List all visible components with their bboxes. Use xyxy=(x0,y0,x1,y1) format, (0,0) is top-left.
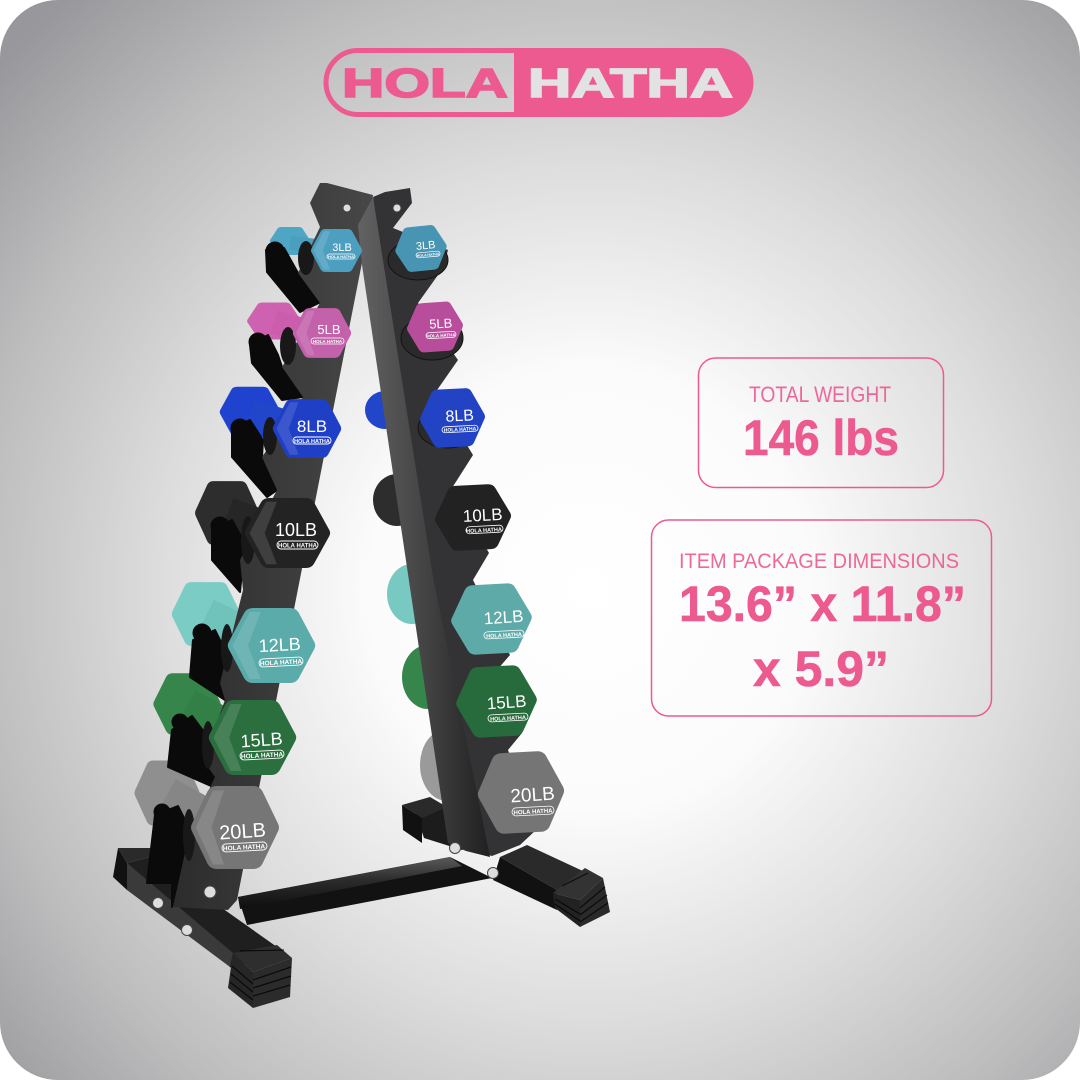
dumbbell 5LB right: 5LB xyxy=(429,315,453,332)
dumbbell 15LB right: 15LB xyxy=(486,692,527,713)
dumbbell 8LB right: HOLA HATHA xyxy=(444,426,477,434)
dumbbell 8LB left xyxy=(276,402,334,455)
dumbbell 5LB left: HOLA HATHA xyxy=(313,339,343,344)
dumbbell 10LB left xyxy=(250,502,321,564)
dumbbell 12LB right: HOLA HATHA xyxy=(486,632,522,640)
dumbbell 15LB left: HOLA HATHA xyxy=(241,751,284,761)
dumbbell 20LB left: 20LB xyxy=(219,819,267,845)
dumbbell 3LB left: 3LB xyxy=(332,242,352,254)
dumbbell 5LB right xyxy=(412,306,458,348)
dumbbell 5LB left xyxy=(296,311,345,355)
logo: HolaHatha xyxy=(326,48,754,117)
dumbbell 10LB left: HOLA HATHA xyxy=(278,544,318,550)
dumbbell 20LB right: HOLA HATHA xyxy=(513,808,553,817)
rack: right sawtooth plate xyxy=(373,188,536,856)
dumbbell 12LB right: 12LB xyxy=(483,607,524,628)
dumbbell 12LB right xyxy=(458,590,525,648)
dumbbell 3LB left: HOLA HATHA xyxy=(328,254,354,259)
dimensions label: ITEM PACKAGE DIMENSIONS xyxy=(679,550,959,573)
dimensions value line 1: 13.6” x 11.8” xyxy=(679,576,966,632)
base: cross bar xyxy=(238,857,492,925)
dumbbell 10LB right: 10LB xyxy=(462,505,503,526)
rack: bolts xyxy=(152,204,498,936)
dumbbell 15LB right xyxy=(463,672,530,731)
dumbbell 8LB right xyxy=(426,394,479,442)
base: left foot xyxy=(113,848,292,1008)
rack: left front plate xyxy=(173,183,373,910)
dumbbell 15LB left xyxy=(214,704,287,771)
total weight value: 146 lbs xyxy=(743,410,899,466)
dumbbell 3LB right: 3LB xyxy=(415,239,436,253)
dumbbell 10LB right: HOLA HATHA xyxy=(466,527,502,535)
dumbbell 15LB left: 15LB xyxy=(240,729,283,751)
dumbbell 8LB left: HOLA HATHA xyxy=(294,439,330,445)
dumbbell 3LB right xyxy=(399,229,443,268)
dimensions value line 2: x 5.9” xyxy=(753,641,889,697)
dumbbell 20LB right xyxy=(486,759,556,826)
dumbbell 20LB left xyxy=(196,790,270,864)
rack: central upright strip xyxy=(358,197,490,857)
dumbbell 12LB left: HOLA HATHA xyxy=(260,658,303,668)
dumbbell 5LB left: 5LB xyxy=(317,322,341,337)
dumbbell 10LB left: 10LB xyxy=(275,520,317,540)
rack: left black rear plate and hooks xyxy=(147,242,325,907)
logo: HolaHatha: HOLA xyxy=(342,60,508,106)
callout: item package dimensions xyxy=(652,520,992,716)
logo: HolaHatha: HATHA xyxy=(528,60,733,106)
dumbbell 10LB right xyxy=(442,490,504,545)
dumbbell 8LB left: 8LB xyxy=(297,417,327,436)
dumbbell 20LB left: HOLA HATHA xyxy=(223,843,266,853)
total weight label: TOTAL WEIGHT xyxy=(749,382,891,407)
dumbbell 12LB left: 12LB xyxy=(258,634,301,656)
dumbbell 20LB right: 20LB xyxy=(510,783,555,808)
dumbbell 8LB right: 8LB xyxy=(445,407,474,426)
base: right foot xyxy=(493,845,610,927)
rear dumbbell heads and handles, left column xyxy=(141,230,325,824)
rear dumbbell heads, right column xyxy=(365,391,474,801)
dumbbell 12LB left xyxy=(232,612,306,679)
callout: total weight xyxy=(698,358,944,488)
dumbbell 3LB left xyxy=(314,231,357,270)
dumbbell 5LB right: HOLA HATHA xyxy=(426,332,457,339)
dumbbell rack with weights xyxy=(113,183,610,1008)
base: rear right foot xyxy=(402,797,490,850)
rack: right hook recesses xyxy=(388,240,478,448)
rack: left front hooks xyxy=(183,241,314,861)
dumbbell 3LB right: HOLA HATHA xyxy=(417,252,440,258)
dumbbell 15LB right: HOLA HATHA xyxy=(490,715,526,723)
